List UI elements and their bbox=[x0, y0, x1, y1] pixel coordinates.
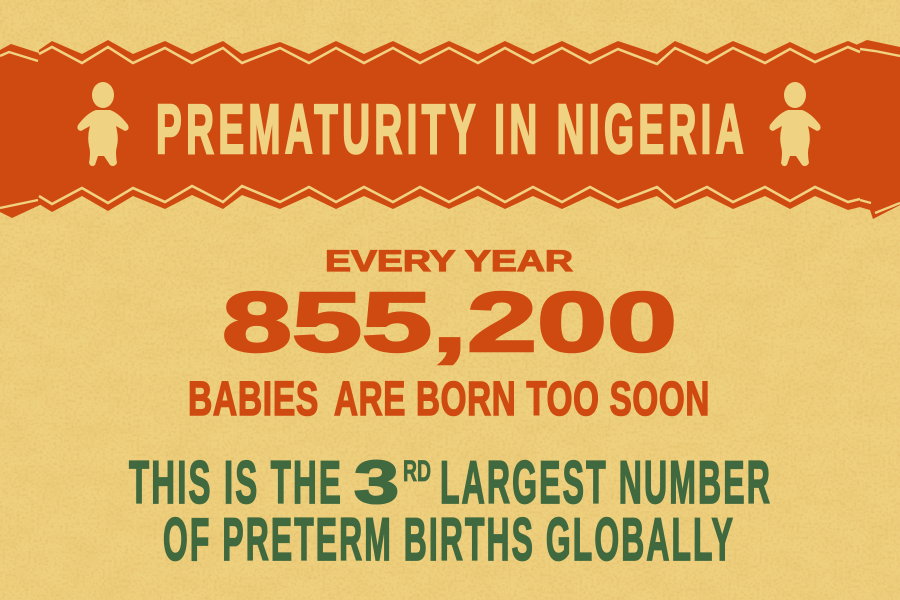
text: third largest number bbox=[129, 449, 772, 516]
text: babies are born too soon: ARE BORN TOO SOON bbox=[334, 373, 710, 426]
banner right fold bbox=[856, 40, 900, 219]
heading: every year: EVERY YEAR bbox=[325, 245, 573, 278]
icon: baby right bbox=[769, 82, 821, 166]
banner bbox=[0, 40, 900, 219]
banner main section bbox=[39, 40, 860, 212]
icon: baby left bbox=[77, 82, 129, 166]
text: babies are born too soon bbox=[188, 373, 710, 426]
text: third largest number: 3 bbox=[354, 449, 399, 516]
banner left fold bbox=[0, 44, 42, 218]
statistic: 855,200: 855,200 bbox=[222, 275, 677, 369]
text: third largest number: THIS IS THE bbox=[129, 449, 343, 516]
text: third largest number: RD bbox=[403, 455, 431, 488]
text: babies are born too soon: BABIES bbox=[188, 373, 319, 426]
